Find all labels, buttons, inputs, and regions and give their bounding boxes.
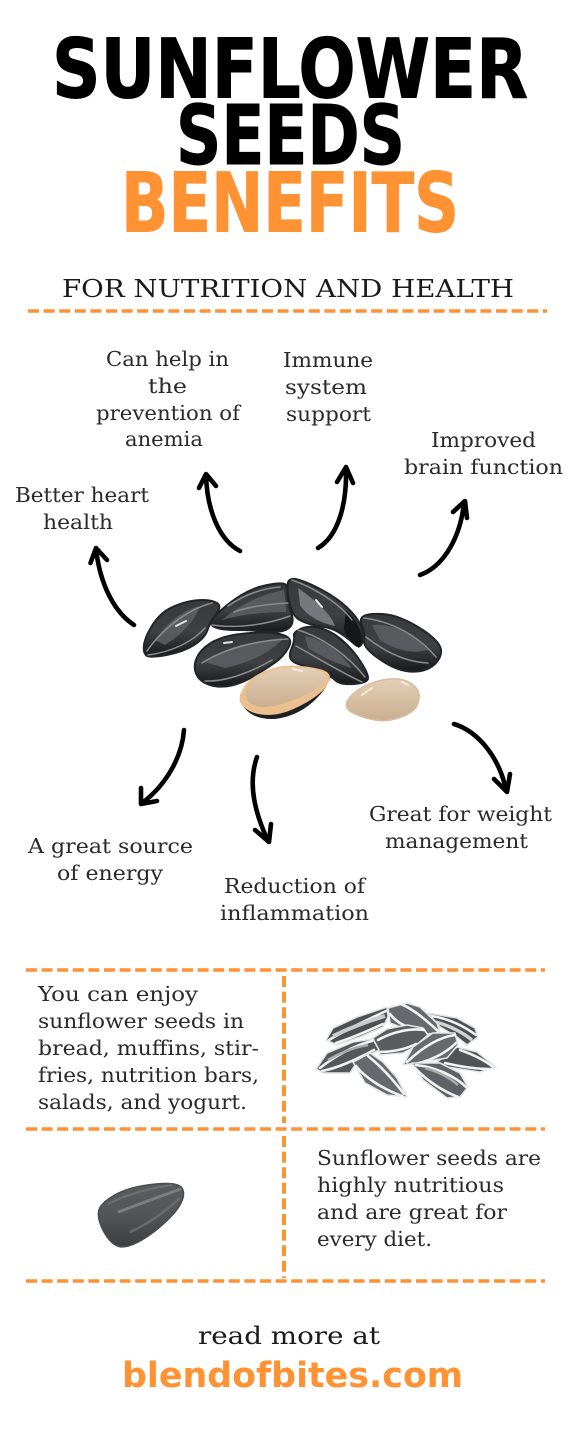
arrow to weight management [454,724,510,792]
benefit: better heart health: health [43,510,113,534]
seed: far right [361,614,441,672]
read more label: read more at [198,1322,380,1350]
seed: top [388,1003,440,1035]
kernel: whole [346,679,419,721]
benefit: prevention of anemia: Can help in [106,347,229,371]
kernel: in shell [240,665,332,719]
seed: left [316,1039,379,1073]
benefit: source of energy [27,834,193,885]
text: nutritious: Sunflower seeds are [317,1146,541,1170]
divider lines [26,970,545,1281]
illustration: striped sunflower seed pile [316,1003,496,1098]
seed: centre right [290,627,368,684]
arrow to anemia [199,474,240,551]
seed: lower left [195,632,290,687]
benefit: prevention of anemia [96,347,241,451]
text: how to enjoy seeds: bread, muffins, stir- [38,1036,259,1060]
benefit: improved brain function: Improved [431,428,536,452]
seed: top right [287,579,363,648]
benefit: immune system support [283,348,373,426]
text: how to enjoy seeds: sunflower seeds in [38,1009,244,1033]
benefit: prevention of anemia: the [148,374,187,398]
benefit: immune system support: support [286,402,372,426]
benefit: immune system support: system [285,375,367,399]
arrow to immune support [318,467,353,548]
benefit: reduction of inflammation: Reduction of [224,874,366,898]
arrow to energy [141,730,184,804]
illustration: single black seed [98,1183,184,1247]
benefit: prevention of anemia: anemia [125,427,203,451]
benefit: source of energy: of energy [57,861,163,885]
seed: back left [326,1007,388,1045]
text: nutritious: every diet. [317,1227,432,1251]
benefit: weight management [369,802,553,853]
benefit: weight management: management [385,829,529,853]
illustration: black sunflower seeds and kernels [144,579,441,721]
text: how to enjoy seeds: You can enjoy [37,982,198,1006]
title [52,22,528,252]
subtitle: FOR NUTRITION AND HEALTH [62,274,514,303]
arrow to heart health [90,548,134,625]
benefit: weight management: Great for weight [369,802,553,826]
benefit: better heart health [15,483,150,534]
seed: front right [403,1033,458,1065]
benefit: source of energy: A great source [27,834,193,858]
title: BENEFITS [121,156,459,252]
website link: blendofbites.com [122,1356,463,1396]
benefit: reduction of inflammation: inflammation [220,901,369,925]
benefit: reduction of inflammation [220,874,369,925]
benefit: better heart health: Better heart [15,483,150,507]
text: how to enjoy seeds [37,982,259,1114]
seed: front bottom [412,1063,468,1098]
text: how to enjoy seeds: salads, and yogurt. [38,1090,247,1114]
text: nutritious: highly nutritious [317,1173,504,1197]
arrow to inflammation [253,757,271,842]
benefit: improved brain function: brain function [404,455,563,479]
seed: front left [353,1053,407,1097]
text: nutritious: and are great for [317,1200,507,1224]
seed: far right [437,1047,496,1072]
seed: centre [373,1025,428,1055]
benefit: improved brain function [404,428,563,479]
seed: top centre [211,583,293,632]
text: nutritious [317,1146,541,1251]
benefit: immune system support: Immune [283,348,373,372]
title: SEEDS [176,89,405,184]
text: how to enjoy seeds: fries, nutrition bars, [38,1063,259,1087]
seed: back right [428,1013,478,1045]
arrow to brain function [420,501,467,575]
benefit: prevention of anemia: prevention of [96,401,241,425]
seed: far left [144,600,219,657]
